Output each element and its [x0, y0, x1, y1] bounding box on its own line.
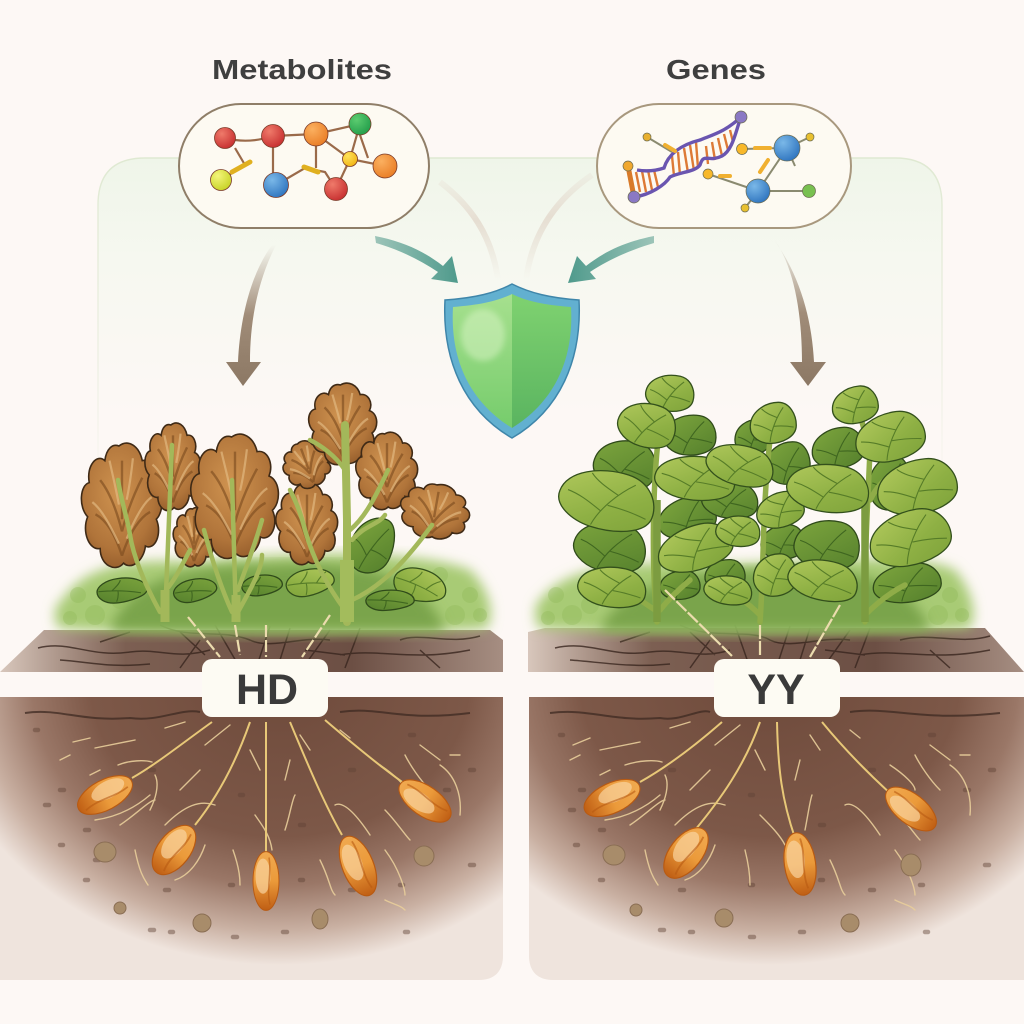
soil cracks left [38, 625, 480, 672]
front leaves [553, 371, 961, 613]
arrow: brown left [226, 245, 276, 386]
roots above label right [665, 590, 840, 657]
stems [615, 410, 915, 622]
arrow: brown right [774, 240, 826, 386]
molecule atoms [210, 113, 397, 200]
buried pebbles left [94, 842, 434, 932]
brown withered leaves [81, 383, 474, 567]
heading: Metabolites: Metabolites [212, 54, 392, 85]
plants: healthy YY group [553, 371, 961, 622]
arrow: teal right [568, 236, 654, 283]
panel: right underground soil [529, 697, 1024, 980]
arrow: teal left [375, 236, 458, 283]
DNA rungs [636, 130, 733, 192]
panel: pale green backdrop [98, 158, 942, 500]
dark specks left [35, 730, 474, 937]
molecule yellow links [232, 162, 318, 172]
underground cracks left [25, 711, 470, 719]
pale root fibers right [570, 722, 970, 910]
icon: shield [445, 284, 579, 438]
pale root fibers left [60, 722, 460, 910]
faint arcs into shield [440, 175, 592, 280]
lower green leaves [95, 511, 449, 612]
plants: withered HD group [81, 383, 474, 622]
dark specks right [560, 735, 994, 937]
ground cover left [55, 554, 491, 634]
DNA strands [634, 117, 741, 197]
seeds right [578, 772, 944, 897]
panel: left underground soil [0, 697, 503, 980]
stems [118, 440, 432, 618]
roots left [132, 720, 405, 852]
roots above label left [188, 615, 330, 657]
ground cover right [535, 559, 974, 634]
label YY [714, 659, 840, 717]
gene links [647, 137, 810, 208]
label HD [202, 659, 328, 717]
roots right [640, 722, 892, 838]
seeds left [71, 768, 458, 910]
heading: Genes: Genes [666, 54, 766, 85]
panel: metabolites pill [179, 104, 429, 228]
soil cracks right [555, 625, 990, 672]
gene nodes [623, 111, 816, 212]
divider band [0, 672, 1024, 697]
label YY: YY [747, 666, 805, 714]
label HD: HD [236, 666, 298, 714]
panel: right surface soil [528, 625, 1024, 672]
molecule bonds [221, 124, 385, 189]
panel: left surface soil [0, 625, 503, 672]
panel: genes pill [597, 104, 851, 228]
underground cracks right [550, 711, 1000, 719]
back leaves [569, 413, 943, 605]
buried pebbles right [603, 845, 921, 932]
